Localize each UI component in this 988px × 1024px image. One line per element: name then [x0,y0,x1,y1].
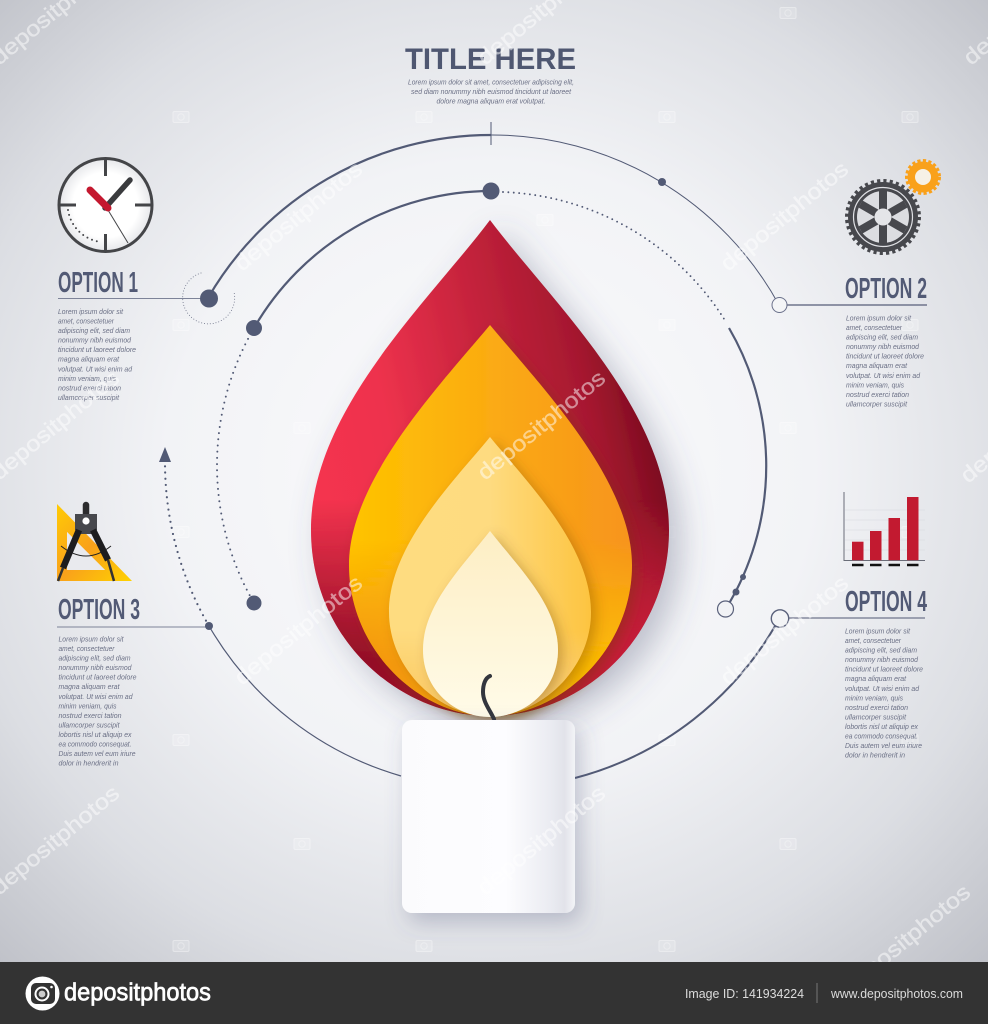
ring node: inner circle end [718,601,734,617]
outer ring line [165,122,779,778]
text: option 3: amet, consectetuer [58,644,115,653]
heading: option 2: OPTION 2 [845,273,927,305]
logo wordmark: depositphotos [64,978,211,1006]
node: option 1 [183,273,235,324]
text: option 1: adipiscing elit, sed diam [58,326,130,335]
flame layer: red [311,220,669,716]
text: option 3: dolor in hendrerit in [58,759,118,768]
watermark text: depositphotos [715,156,853,276]
watermark text: depositphotos [715,570,853,690]
watermark text: depositphotos [837,879,975,999]
text: option 2: amet, consectetuer [846,323,902,332]
text: option 3: nostrud exerci tation [58,711,122,720]
text: option 3: magna aliquam erat [58,682,120,691]
flame layer: cream [423,531,558,717]
node: option 4 [771,610,789,627]
text: option 1: nonummy nibh euismod [58,336,132,345]
text: option 3: tincidunt ut laoreet dolore [58,673,136,682]
title description: dolore magna aliquam erat volutpat. [436,96,546,106]
flame layer: pale yellow [389,437,591,716]
watermark text: depositphotos [229,156,367,276]
text: option 2: volutpat. Ut wisi enim ad [846,371,921,380]
text: option 4: nostrud exerci tation [845,703,908,712]
text: option 4: Duis autem vel eum iriure [845,741,922,750]
text: option 4: nonummy nibh euismod [845,655,919,664]
panel: option 4 [771,492,927,760]
text: option 4: volutpat. Ut wisi enim ad [845,684,920,693]
text: option 3: adipiscing elit, sed diam [58,654,130,662]
text: option 3: minim veniam, quis [58,701,117,710]
watermark camera marks [173,8,918,952]
icon: clock [59,158,152,252]
text: option 4: ullamcorper suscipit [845,712,907,722]
text: option 4: ea commodo consequat. [845,732,918,741]
icon: set square and compass [57,504,132,581]
text: option 4: adipiscing elit, sed diam [845,646,917,654]
text: option 2: nonummy nibh euismod [846,342,920,351]
text: option 2: minim veniam, quis [846,380,904,389]
icon: bar chart [844,492,925,565]
candle body [402,720,575,913]
panel: option 2 [772,162,938,408]
site address: www.depositphotos.com [830,987,963,1001]
title description: Lorem ipsum dolor sit amet, consectetuer adipiscing elit, [408,78,574,86]
heading: option 1: OPTION 1 [58,267,138,299]
footer bar [0,962,988,1024]
text: option 1: nostrud exerci tation [58,383,121,392]
arrow head [159,447,171,462]
heading: option 4: OPTION 4 [845,586,927,618]
text: option 3: lobortis nisl ut aliquip ex [58,730,132,739]
text: option 1: magna aliquam erat [58,355,120,364]
text: option 1 [58,307,136,402]
text: option 4: tincidunt ut laoreet dolore [845,665,923,674]
text: option 4: dolor in hendrerit in [845,751,905,760]
panel: option 1 [58,158,235,402]
text: option 2: nostrud exerci tation [846,390,909,399]
text: option 1: volutpat. Ut wisi enim ad [58,364,133,373]
text: option 2: adipiscing elit, sed diam [846,332,918,342]
text: option 3: Duis autem vel eum iriure [58,749,136,758]
title: TITLE HERE [405,43,576,76]
text: option 4 [845,626,923,760]
text: option 4: magna aliquam erat [845,674,907,683]
text: option 3: volutpat. Ut wisi enim ad [58,692,133,701]
text: option 1: minim veniam, quis [58,374,116,383]
text: option 4: Lorem ipsum dolor sit [845,626,911,636]
text: option 4: amet, consectetuer [845,636,901,645]
watermark text: depositphotos [472,365,610,485]
title description: sed diam nonummy nibh euismod tincidunt ut laoreet [411,87,572,96]
text: option 2: magna aliquam erat [846,361,908,370]
watermark text: depositphotos [229,570,367,690]
text: option 1: tincidunt ut laoreet dolore [58,345,136,354]
text: option 3: ullamcorper suscipit [58,720,120,730]
panel: option 3 [57,504,213,768]
text: option 4: minim veniam, quis [845,693,903,702]
wick [483,676,494,719]
watermark text: depositphotos [472,780,610,900]
text: option 3 [58,634,136,768]
image id: Image ID: 141934224 [685,987,804,1001]
icon: camera logo [26,976,60,1010]
text: option 4: lobortis nisl ut aliquip ex [845,722,918,731]
flame layer: orange [349,325,632,716]
heading: option 3: OPTION 3 [58,594,140,626]
text: option 2: tincidunt ut laoreet dolore [846,352,924,361]
title description [408,78,574,106]
text: option 1: ullamcorper suscipit [58,393,120,402]
node: option 3 [205,622,213,630]
text: option 1: amet, consectetuer [58,316,114,326]
text: option 2: ullamcorper suscipit [846,400,908,408]
text: option 2 [846,314,924,408]
text: option 1: Lorem ipsum dolor sit [58,307,124,316]
node: option 2 [772,298,787,312]
text: option 3: Lorem ipsum dolor sit [58,634,124,644]
inner ring line [217,182,766,610]
text: option 3: ea commodo consequat. [58,740,132,749]
icon: gears [848,162,938,252]
candle flame [311,220,669,719]
text: option 3: nonummy nibh euismod [58,663,132,672]
text: option 2: Lorem ipsum dolor sit [846,314,912,322]
